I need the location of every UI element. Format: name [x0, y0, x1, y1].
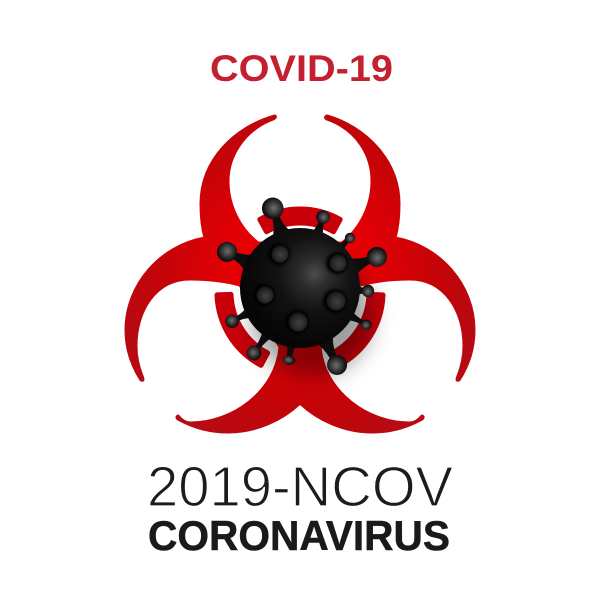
biohazard symbol — [126, 116, 474, 432]
ring segment: bottom right — [332, 294, 383, 365]
virus shadow — [252, 256, 372, 376]
ring segment: top — [260, 209, 340, 232]
heading: CORONAVIRUS: CORONAVIRUS — [148, 512, 450, 559]
virus — [213, 195, 390, 379]
virus body — [240, 228, 360, 348]
surface bumps — [253, 243, 348, 334]
ring segment: bottom left — [217, 294, 268, 365]
title: COVID-19 — [210, 48, 393, 89]
virus spikes — [213, 195, 390, 379]
biohazard trefoil — [126, 116, 474, 432]
heading: 2019-NCOV: 2019-NCOV — [147, 455, 453, 519]
